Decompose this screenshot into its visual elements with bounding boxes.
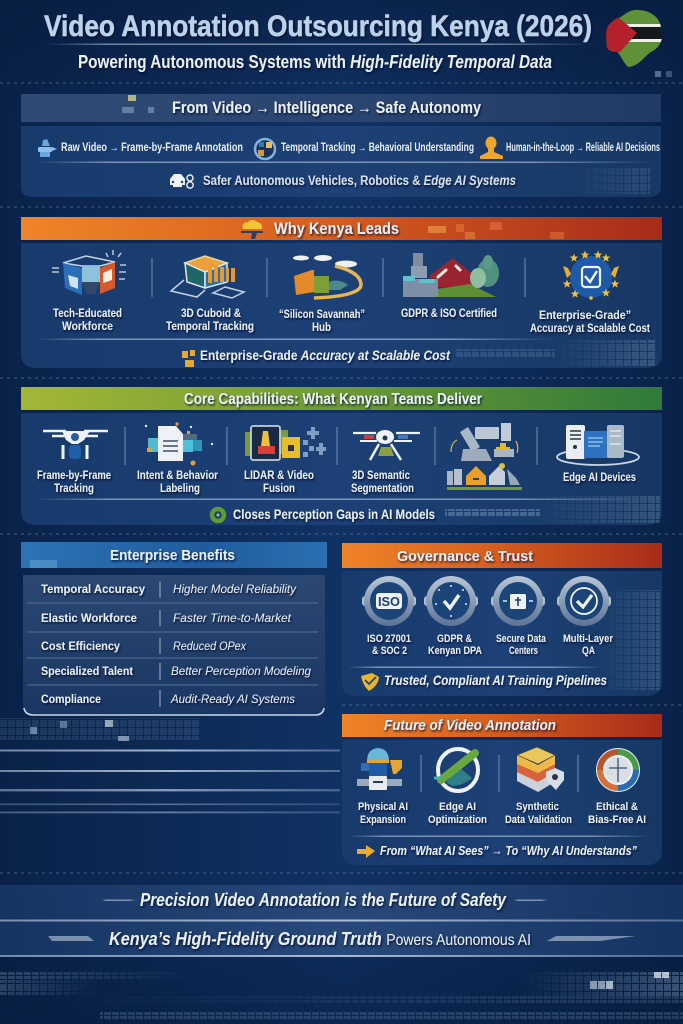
panel: why Kenya leads (21, 217, 662, 368)
table row: Elastic Workforce (41, 611, 137, 625)
table row: Specialized Talent (41, 664, 133, 678)
table row: Better Perception Modeling (171, 664, 311, 678)
icon: GDPR and ISO certified (403, 253, 499, 297)
icon: temporal tracking (255, 139, 275, 159)
icon: closing loop (212, 509, 224, 521)
panel body (21, 413, 662, 525)
icon: physical AI (357, 748, 402, 790)
panel header (342, 714, 662, 737)
table row: Reduced OPex (173, 639, 247, 653)
panel header: Core Capabilities: What Kenyan Teams Deliver (184, 391, 482, 408)
label: 3D Semantic (352, 470, 411, 482)
label: Accuracy at Scalable Cost (530, 323, 650, 335)
panel header (342, 543, 662, 568)
icon: tech-educated workforce (52, 250, 126, 295)
label: Hub (312, 322, 331, 334)
panel header: Enterprise Benefits (110, 548, 235, 564)
label: Kenyan DPA (428, 645, 482, 657)
label: Optimization (428, 814, 487, 826)
label: Fusion (263, 483, 295, 495)
icon: multi-layer QA badge (557, 576, 611, 626)
label: Synthetic (516, 801, 559, 813)
panel body (342, 740, 662, 865)
icon: document labeling (145, 422, 213, 466)
label: Temporal Tracking (166, 321, 254, 333)
label: Intent & Behavior (137, 470, 218, 482)
icon: edge AI optimization (434, 749, 478, 791)
footer statement: Trusted, Compliant AI Training Pipelines (384, 673, 607, 688)
decorative dotted separators (0, 83, 683, 873)
icon: shield (361, 673, 379, 691)
title block (44, 10, 595, 72)
panel body (342, 571, 662, 696)
benefits table (23, 575, 325, 715)
table row (41, 582, 297, 596)
panel header: Why Kenya Leads (274, 220, 399, 238)
icon: GDPR badge (424, 576, 478, 626)
label: Centers (509, 645, 538, 657)
panel: enterprise benefits (21, 542, 327, 715)
table row (41, 692, 295, 706)
icon: human in the loop (480, 136, 503, 159)
table row: Higher Model Reliability (173, 582, 297, 596)
label: 3D Cuboid & (181, 308, 241, 320)
table row (41, 611, 292, 625)
label: Bias-Free AI (588, 814, 646, 826)
closing line one: Precision Video Annotation is the Future of Safety (140, 889, 507, 910)
label: Secure Data (496, 633, 547, 645)
label: Segmentation (351, 483, 414, 495)
label: Ethical & (596, 801, 638, 813)
icon: raw video (38, 139, 57, 157)
table row: Cost Efficiency (41, 639, 120, 653)
icon: Kenya flag map (606, 10, 662, 67)
table row (41, 639, 247, 653)
panel: future of video annotation (342, 714, 662, 865)
footer statement: Closes Perception Gaps in AI Models (233, 507, 435, 522)
icon: 3D cuboid (171, 256, 244, 298)
panel header (21, 94, 661, 122)
label: Enterprise-Grade” (539, 310, 631, 322)
label: GDPR & (437, 633, 472, 645)
label: Physical AI (358, 801, 408, 813)
flow step: temporal tracking: Temporal Tracking → Behavioral Understanding (281, 142, 474, 154)
label: Workforce (62, 321, 113, 333)
panel: core capabilities (21, 387, 662, 525)
icon: robot arm and sites (447, 423, 522, 490)
label: GDPR & ISO Certified (401, 308, 497, 320)
panel header: Future of Video Annotation (384, 718, 556, 734)
closing banners (0, 885, 683, 957)
panel: from video to safe autonomy (21, 94, 661, 197)
icon: enterprise-grade badge (563, 250, 619, 300)
title: Video Annotation Outsourcing Kenya (2026) (44, 10, 592, 43)
panel header: Governance & Trust (397, 548, 533, 565)
label: Tracking (54, 483, 94, 495)
icon: segmentation drone (353, 430, 420, 460)
label: Multi-Layer (563, 633, 614, 645)
decorative horizontal light streaks (0, 750, 340, 813)
panel header: From Video → Intelligence → Safe Autonomy (172, 99, 482, 117)
icon: secure data center badge (491, 576, 545, 626)
subtitle: Powering Autonomous Systems with High-Fidelity Temporal Data (78, 52, 552, 72)
panel body (21, 243, 662, 368)
panel body (21, 126, 661, 197)
icon: scale (182, 350, 195, 367)
icon: LIDAR and video fusion (245, 426, 326, 460)
icon: ethical AI (596, 748, 640, 792)
label: ISO 27001 (367, 633, 411, 645)
flow step: raw video: Raw Video → Frame-by-Frame Annotation (61, 142, 243, 154)
icon: arrow (357, 845, 375, 858)
table row: Faster Time-to-Market (173, 611, 292, 625)
table row: Compliance (41, 692, 101, 706)
label: LIDAR & Video (244, 470, 314, 482)
footer statement: Enterprise-Grade Accuracy at Scalable Cost (200, 348, 450, 363)
label: Edge AI Devices (563, 472, 636, 484)
icon: ISO badge: ISO (378, 594, 400, 609)
closing line two: Kenya’s High-Fidelity Ground Truth Powers Autonomous AI (109, 928, 531, 949)
label: Frame-by-Frame (37, 470, 111, 482)
panel header (21, 542, 327, 568)
footer statement: From “What AI Sees” → To “Why AI Understands” (380, 843, 637, 858)
label: Edge AI (439, 801, 476, 813)
table row (41, 664, 311, 678)
panel header (21, 387, 662, 410)
table row: Audit-Ready AI Systems (170, 692, 295, 706)
label: “Silicon Savannah” (279, 309, 365, 321)
icon: ISO badge (362, 576, 416, 626)
label: Data Validation (505, 814, 572, 826)
label: Labeling (160, 483, 200, 495)
icon: synthetic data validation (517, 747, 564, 792)
panel header (21, 217, 662, 240)
label: QA (582, 645, 595, 657)
icon: vehicle and robot (170, 174, 193, 188)
table row: Temporal Accuracy (41, 582, 145, 596)
label: Expansion (360, 814, 406, 826)
panel: governance and trust (342, 543, 662, 696)
icon: tracking drone (43, 431, 108, 459)
outcome line: Safer Autonomous Vehicles, Robotics & Edge AI Systems (203, 173, 516, 188)
icon: silicon savannah (293, 255, 361, 298)
icon: edge AI devices (557, 425, 639, 465)
label: Tech-Educated (53, 308, 122, 320)
icon: cloud (241, 220, 263, 239)
label: & SOC 2 (372, 645, 407, 657)
